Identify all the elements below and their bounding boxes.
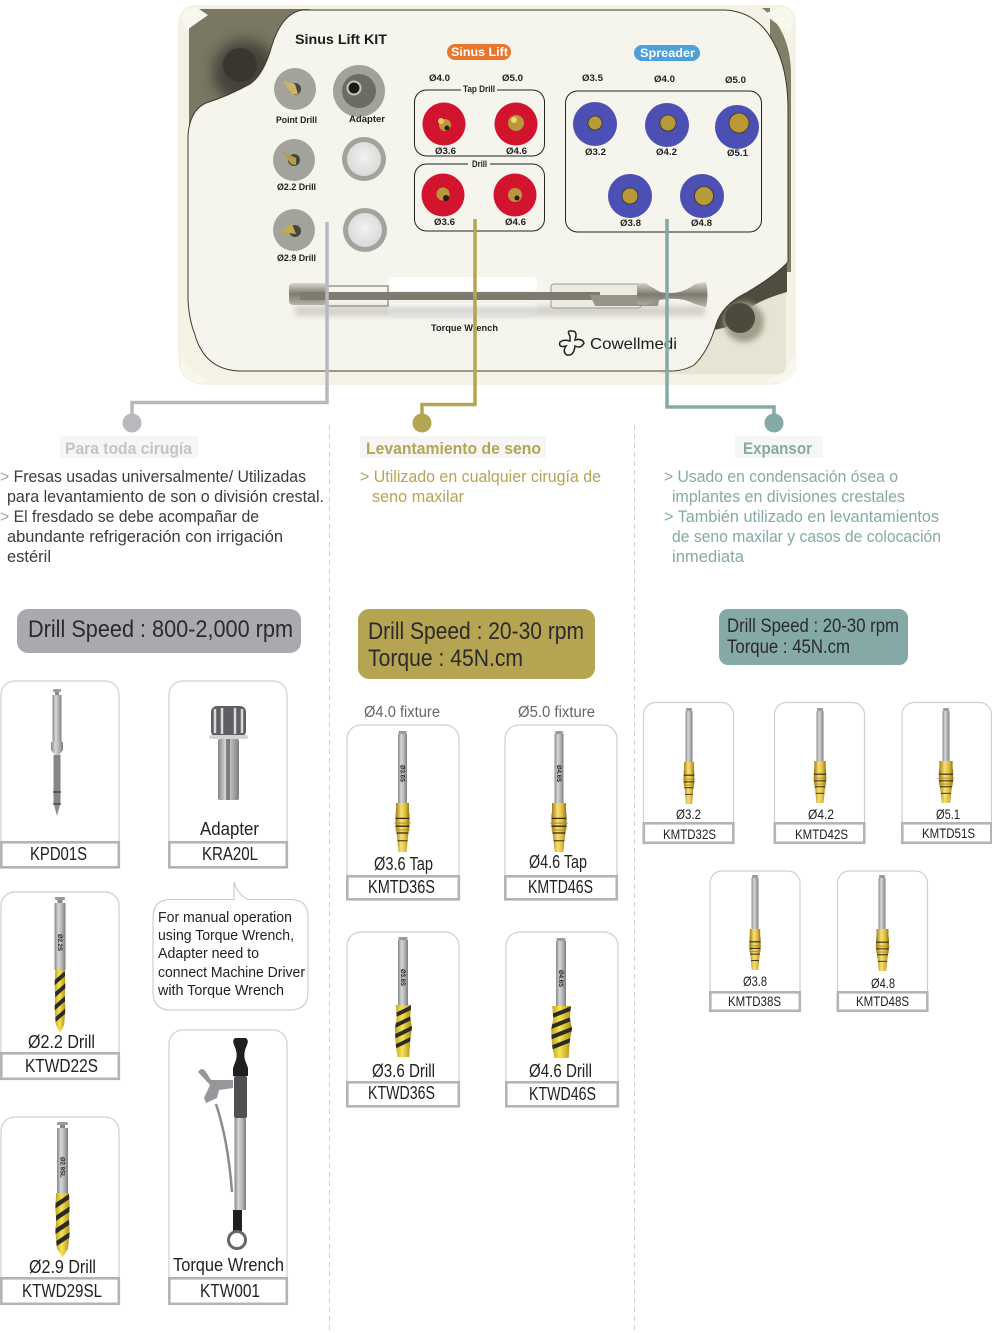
spreader card: 5.1 [902,702,992,843]
column 1 description: > El fresdado se debe acompañar de [0,507,259,526]
product card: 3.6 tap: Ø3.6 Tap [374,854,433,874]
4.6 drill image [550,938,572,1058]
column diameter labels [429,73,746,85]
spreader card: 3.8: Ø3.8 [743,973,767,989]
3.6 tap image: Ø3.6S [398,765,404,782]
badge: gold drill speed and torque: Drill Speed : 20-30 rpm [368,618,584,645]
spreader card: 4.8: KMTD48S [856,993,909,1009]
red and blue socket labels [434,146,748,228]
product card: 3.6 tap: KMTD36S [368,877,435,897]
product card: 4.6 tap: Ø4.6 Tap [529,852,587,872]
screw halo [724,302,764,342]
Cowellmedi logo [560,331,677,355]
red and blue socket labels: Ø3.6 [435,146,456,156]
Cowellmedi logo: Cowellmedi [590,336,677,353]
5.1 spreader image [938,708,954,803]
spreader card: 5.1: KMTD51S [922,825,975,841]
badge: gold drill speed and torque: Torque : 45N.cm [368,645,523,672]
column 1 description [0,467,324,566]
callout: manual operation note [153,882,308,1010]
column 3 description [664,467,941,566]
red and blue socket labels: Ø4.8 [691,218,712,228]
column 1 description: abundante refrigeración con irrigación [7,527,283,546]
2.2 drill image: Ø2.2S [56,934,62,951]
product card: 4.6 drill: KTWD46S [529,1084,596,1104]
3.2 spreader image [683,708,695,804]
product card: 3.6 drill [347,932,459,1106]
column 3 heading: Expansor [743,440,813,458]
callout: manual operation note: Adapter need to [158,945,259,962]
spreader card: 4.2: KMTD42S [795,826,848,842]
kit title: Sinus Lift KIT [295,32,388,47]
column 3 description: > Usado en condensación ósea o [664,467,898,486]
2.2 drill image [54,897,66,1033]
product card: torque wrench [169,1030,287,1304]
column 3 description: inmediata [672,547,745,566]
red and blue socket labels: Ø4.6 [505,217,526,227]
socket labels: Ø2.9 Drill [277,253,316,263]
Drill group box [414,159,544,231]
red and blue socket labels: Ø3.2 [585,147,606,157]
column 3 description: de seno maxilar y casos de colocación [672,527,941,546]
connector line: grey, all surgery [122,222,327,432]
screw: bottom right [725,303,755,333]
torque wrench image [198,1038,248,1248]
badge: teal drill speed and torque [719,609,908,665]
screw: top left [223,48,257,82]
product card: 4.6 drill: Ø4.6 Drill [529,1061,592,1081]
spreader card: 3.8 [710,871,800,1011]
3.6 drill image [394,937,412,1057]
fixture label 5.0: Ø5.0 fixture [518,704,595,721]
fixture label 4.0: Ø4.0 fixture [364,704,440,721]
adapter image [209,706,248,800]
Drill group box: Drill [472,159,487,169]
4.2 spreader image [813,708,827,803]
column diameter labels: Ø3.5 [582,73,603,83]
callout: manual operation note: using Torque Wrench, [158,927,294,944]
grey sockets: universal drills [273,65,387,252]
product card: 3.6 drill: KTWD36S [368,1083,435,1103]
Spreader pill: Spreader [640,46,695,60]
spreader card: 3.2: Ø3.2 [676,806,701,822]
3.6 tap image [394,731,410,852]
Spreader pill [634,45,700,61]
product card: Adapter: KRA20L [202,844,258,864]
column 2 heading: Levantamiento de seno [366,440,541,458]
product card: 2.2 drill: KTWD22S [25,1056,98,1076]
Tap Drill group box [414,84,544,156]
product card: 4.6 tap [505,725,617,899]
lower right tray floor [660,258,786,374]
product card: 2.9 drill: Ø2.9 Drill [29,1257,96,1277]
column 2 description: seno maxilar [372,487,464,506]
top left tray well [189,9,310,135]
spreader card: 5.1: Ø5.1 [936,806,960,822]
column 1 description: > Fresas usadas universalmente/ Utilizadas [0,467,306,486]
callout: manual operation note: For manual operation [158,909,292,926]
product card: KPD01S: KPD01S [30,844,87,864]
red and blue socket labels: Ø3.8 [620,218,641,228]
column 3 description: > También utilizado en levantamientos [664,507,939,526]
spreader card: 4.2 [774,702,864,843]
connector line: teal, expander [667,219,784,432]
spreader card: 3.2 [644,702,734,843]
insert board [188,10,788,371]
blue sockets [573,102,759,218]
spreader card: 4.2: Ø4.2 [808,806,834,822]
socket labels: Adapter [349,114,386,124]
product card: 3.6 drill: Ø3.6 Drill [372,1061,435,1081]
column 3 heading [735,436,823,458]
2.9 drill image [54,1122,70,1257]
tray outer case [178,5,796,385]
column 3 description: implantes en divisiones crestales [672,487,905,506]
callout: manual operation note: with Torque Wrench [157,982,284,999]
socket labels [276,114,386,263]
torque wrench in tray [289,282,708,316]
red sockets [422,102,538,216]
Sinus Lift pill: Sinus Lift [451,45,508,59]
product card: torque wrench: Torque Wrench [173,1255,284,1275]
3.8 spreader image [749,875,761,970]
red and blue socket labels: Ø3.6 [434,217,455,227]
badge: teal drill speed and torque: Torque : 45N.cm [727,637,850,658]
product card: 4.6 tap: KMTD46S [528,877,593,897]
product card: 4.6 drill [506,932,618,1106]
red and blue socket labels: Ø5.1 [727,148,748,158]
kit photo: Sinus Lift KIT tray [178,5,797,385]
2.9 drill image: Ø2.9SL [58,1157,64,1178]
column diameter labels: Ø4.0 [654,74,675,84]
product card: Adapter: Adapter [200,819,259,839]
connector line: gold, sinus lift [412,219,475,432]
Spreader group box [566,91,762,232]
socket labels: Point Drill [276,115,317,125]
column diameter labels: Ø5.0 [725,75,746,85]
4.6 tap image: Ø4.6S [555,765,561,782]
product card: Adapter [169,681,287,867]
badge: drill speed 800-2,000 rpm [17,609,301,653]
callout: manual operation note: connect Machine Driver [158,964,305,981]
socket labels: Ø2.2 Drill [277,182,316,192]
torque wrench label: Torque Wrench [431,323,498,333]
4.8 spreader image [875,875,890,971]
lower right dark shade [714,262,787,330]
3.6 drill image: Ø3.6S [399,969,405,986]
corner clips [182,7,208,30]
column 1 description: estéril [7,547,51,566]
white wrench clips [388,277,538,315]
product card: torque wrench: KTW001 [200,1281,260,1301]
column 1 heading: Para toda cirugía [65,440,193,458]
point drill image [51,689,63,816]
badge: drill speed 800-2,000 rpm: Drill Speed : 800-2,000 rpm [28,616,293,643]
4.6 drill image: Ø4.6S [557,970,563,987]
top left well shadow [213,40,277,104]
column diameter labels: Ø5.0 [502,73,523,83]
product card: 2.2 drill [1,892,119,1079]
column 2 description: > Utilizado en cualquier cirugía de [360,467,601,486]
spreader card: 4.8: Ø4.8 [871,975,895,991]
column 2 description [360,467,601,506]
product card: 2.2 drill: Ø2.2 Drill [28,1032,95,1052]
product card: 2.9 drill [1,1117,119,1304]
spreader card: 4.8 [838,871,928,1011]
spreader card: 3.8: KMTD38S [728,993,781,1009]
red and blue socket labels: Ø4.2 [656,147,677,157]
product card: KPD01S [1,681,119,867]
product card: 2.9 drill: KTWD29SL [22,1281,102,1301]
badge: teal drill speed and torque: Drill Speed : 20-30 rpm [727,616,899,637]
column diameter labels: Ø4.0 [429,73,450,83]
top right tray strip [725,8,791,272]
Tap Drill group box: Tap Drill [463,84,495,94]
product card: 3.6 tap [347,725,459,899]
badge: gold drill speed and torque [358,609,595,679]
spreader card: 3.2: KMTD32S [663,826,716,842]
red and blue socket labels: Ø4.6 [506,146,527,156]
4.6 tap image [550,731,568,852]
column 1 description: para levantamiento de son o división crestal. [7,487,324,506]
